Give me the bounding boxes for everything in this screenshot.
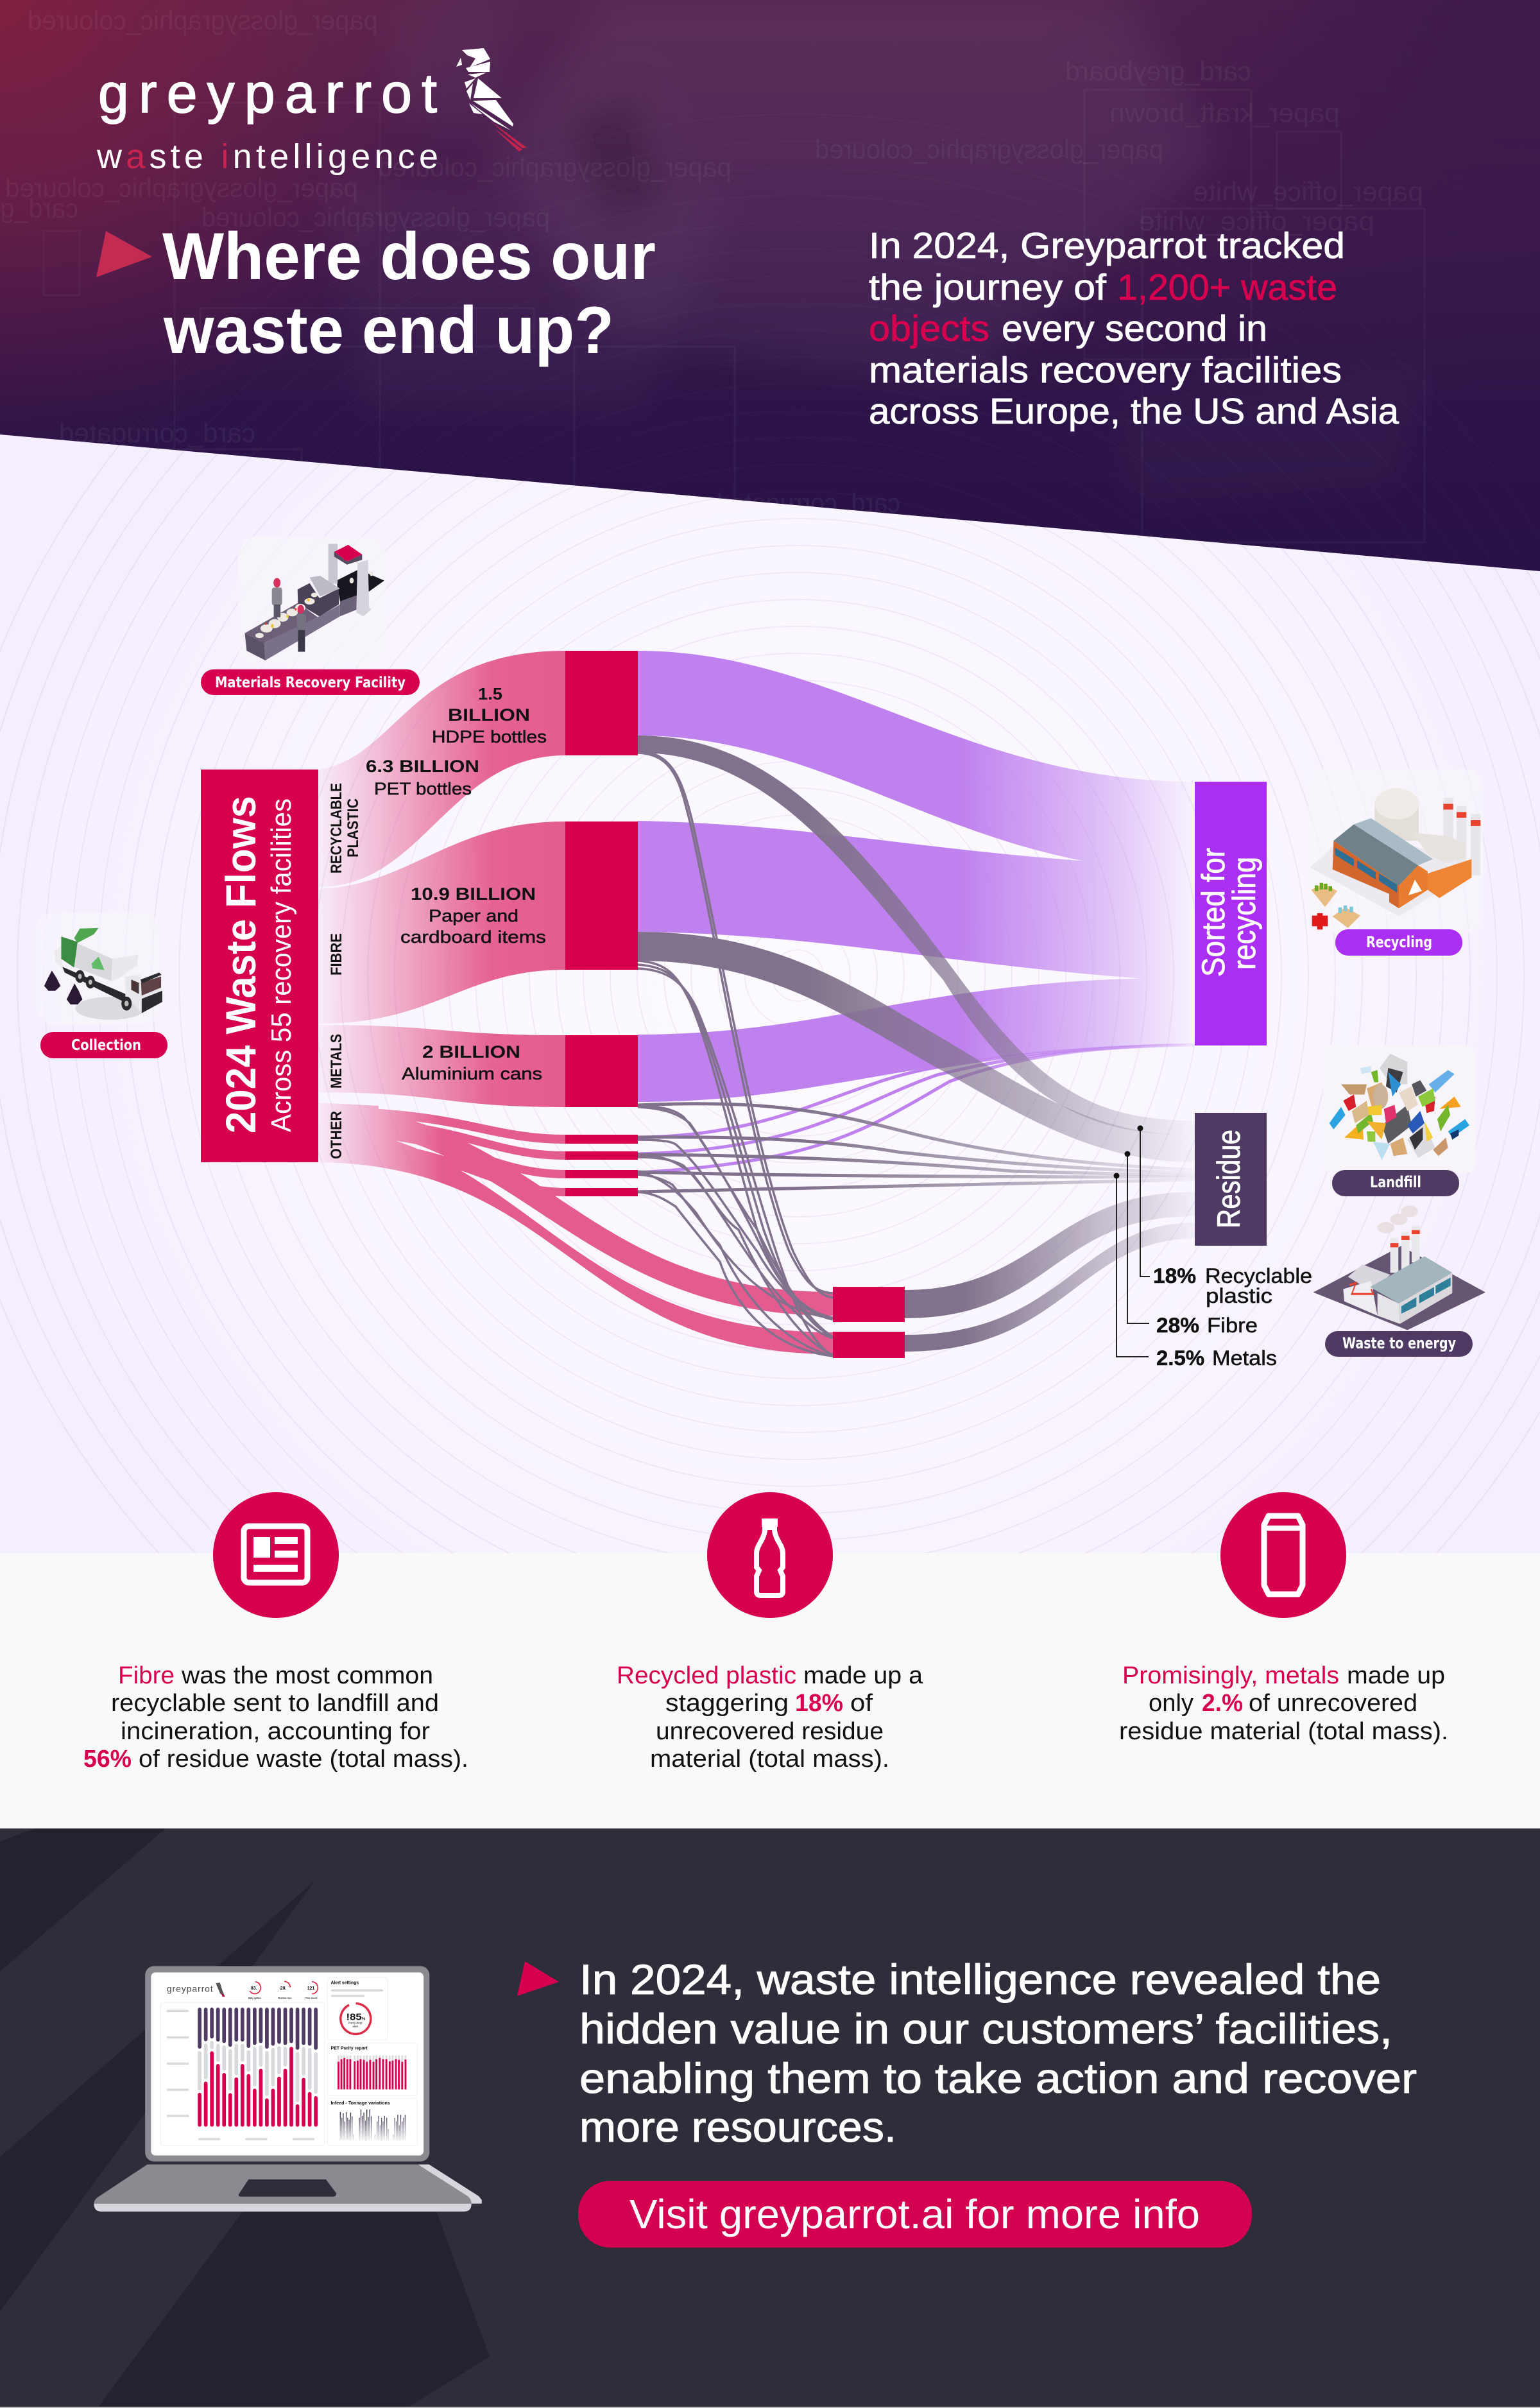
panel: hero header background [0,0,1540,1837]
intro text: In 2024, Greyparrot tracked [869,225,1345,266]
panel: hero header background: paper_glossygraphic_coloured [28,5,378,35]
label: waste to energy [1325,1331,1473,1357]
label: materials recovery facility [201,669,420,695]
icon: parrot [456,48,527,151]
icon: laptop dashboard: Time saved [305,1997,317,2000]
label: collection: Collection [71,1037,141,1054]
callouts: residue breakdown: plastic [1206,1284,1272,1307]
text: plastic fact: unrecovered residue [656,1718,884,1745]
node: recyclable plastic [565,651,638,755]
dashboard gauges [250,1981,318,1994]
icon: laptop dashboard: 83. [251,1986,257,1991]
panel: hero header background: paper_glossygraphic_coloured [5,173,358,203]
dashboard panels [160,1977,417,2146]
labels: item counts on flows: 2 BILLION [422,1042,520,1062]
intro text: every second in [1002,308,1267,349]
icon: landfill pile [1323,1045,1476,1173]
callouts: residue breakdown: Metals [1212,1346,1277,1370]
dashboard alert settings: Alert settings [330,1981,359,1985]
flow: lower nodes to residue [905,1192,1195,1352]
panel: hero header background: card_greyboard [1065,56,1251,86]
callouts: residue breakdown: 28% [1156,1314,1199,1337]
footer statement: In 2024, waste intelligence revealed the [579,1956,1381,2003]
footer statement: more resources. [579,2103,896,2151]
footer statement [579,1956,1417,2151]
icon: laptop dashboard [94,1966,482,2212]
text: metals fact: residue material (total mass). [1119,1718,1448,1745]
text: fibre fact: incineration, accounting for [121,1718,430,1745]
labels: item counts on flows: PET bottles [374,779,472,798]
icon: laptop dashboard: 28. [280,1986,286,1991]
laptop screen [145,1966,429,2162]
panel: residue [1195,1113,1267,1246]
label: materials recovery facility: Materials Recovery Facility [215,675,406,691]
logo tagline: waste intelligence [96,137,438,176]
icon: title triangle [96,231,152,277]
panel: 2024 waste flows title box [201,770,318,1162]
text: fibre fact: was the most common [181,1662,433,1689]
callouts: residue breakdown [1114,1126,1312,1370]
title: waste end up? [163,293,614,368]
icon: can [1220,1492,1346,1618]
icon: footer triangle [517,1961,559,1996]
text: plastic fact [617,1662,923,1773]
labels: item counts on flows [366,684,547,1083]
icon: waste to energy plant [1313,1205,1485,1330]
title: Where does our [162,219,656,294]
button: visit greyparrot.ai [578,2181,1252,2248]
label: landfill: Landfill [1370,1173,1421,1191]
labels: material categories: FIBRE [328,933,345,976]
heading: 2024 Waste Flows: 2024 Waste Flows [217,796,264,1133]
logo wordmark: greyparrot [98,63,437,125]
dashboard PET purity report: PET Purity report [330,2046,368,2051]
panel: footer background [0,1828,1540,2408]
flow: thin grey lines to lower nodes [638,751,833,1356]
text: fibre fact: Fibre [118,1662,175,1689]
text: plastic fact: staggering [665,1690,789,1717]
panel: hero header background: card_corrugated [59,418,255,448]
intro text: objects [869,308,989,349]
panel: hero header background: paper_office_white [1139,206,1374,236]
text: metals fact [1119,1662,1448,1745]
panel: facts background [0,1553,1540,1828]
text: fibre fact: 56% [83,1746,132,1773]
button: visit greyparrot.ai: Visit greyparrot.ai for more info [629,2191,1200,2237]
panel: hero header background: paper_glossygraphic_coloured [815,134,1163,164]
panel: sorted for recycling: Sorted for [1195,848,1231,977]
chart: sankey waste flows [319,651,1195,1358]
text: plastic fact: made up a [803,1662,923,1689]
callouts: residue breakdown: Recyclable [1205,1264,1312,1287]
footer statement: enabling them to take action and recover [579,2054,1417,2102]
label: waste to energy: Waste to energy [1342,1334,1456,1352]
labels: item counts on flows: cardboard items [400,927,546,947]
labels: item counts on flows: 10.9 BILLION [411,884,536,904]
text: metals fact: made up [1347,1662,1445,1689]
labels: item counts on flows: 6.3 BILLION [366,757,479,776]
text: fibre fact: recyclable sent to landfill and [111,1690,439,1717]
dashboard alert settings: !85 [346,2011,362,2022]
panel: hero header background: paper_kraft_brown [1109,98,1340,128]
icon: bottle [707,1492,833,1618]
dashboard alert settings: % [362,2017,366,2021]
panel: sorted for recycling: recycling [1226,857,1262,970]
icon: laptop dashboard: 121 [307,1986,314,1991]
icon: materials recovery facility [237,536,387,667]
footer statement: hidden value in our customers’ facilities, [579,2005,1392,2052]
flow: thin purple strands [638,1045,1195,1173]
icon: laptop dashboard: Daily uptime [248,1997,261,2000]
dashboard PET purity report [330,2046,406,2090]
intro text [869,225,1399,432]
panel: hero header background: paper_glossygraphic_coloured [201,202,550,232]
label: recycling [1335,929,1462,956]
icon: newspaper [213,1492,339,1618]
labels: material categories: RECYCLABLE [328,783,345,873]
panel: hero header background: paper_office_white [1193,176,1423,207]
laptop base [94,2165,482,2212]
text: plastic fact: Recycled plastic [617,1662,796,1689]
flow: purple sorted for recycling [638,651,1195,1102]
text: metals fact: Promisingly, metals [1122,1662,1339,1689]
callouts: residue breakdown: 18% [1153,1264,1196,1287]
dashboard main chart [166,2008,318,2140]
labels: material categories: OTHER [328,1111,345,1159]
labels: item counts on flows: HDPE bottles [432,727,547,746]
dashboard logo [167,1982,225,1997]
intro text: materials recovery facilities [869,350,1342,391]
text: plastic fact: 18% [795,1690,843,1717]
icon: collection truck [35,913,163,1024]
dashboard infeed tonnage variations [330,2101,405,2140]
labels: item counts on flows: BILLION [448,705,530,725]
dashboard alert settings: alert [352,2025,359,2028]
dashboard logo: greyparrot [167,1984,213,1994]
label: recycling: Recycling [1366,933,1432,951]
text: fibre fact: of residue waste (total mass). [139,1746,468,1773]
text: metals fact: 2.% [1202,1690,1243,1717]
text: fibre fact [83,1662,468,1773]
intro text: the journey of [869,267,1106,308]
flow: thin grey lines to residue [638,1104,1195,1192]
panel: hero header background: card_corrugated [717,488,900,518]
node: fibre [565,821,638,970]
text: plastic fact: material (total mass). [650,1746,889,1773]
panel: residue: Residue [1211,1130,1247,1228]
panel: sorted for recycling [1195,782,1267,1045]
text: metals fact: only [1149,1690,1194,1717]
text: metals fact: of unrecovered [1249,1690,1417,1717]
flow: other waste strands [319,1103,833,1354]
callouts: residue breakdown: Fibre [1207,1314,1258,1337]
text: plastic fact: of [850,1690,873,1717]
label: landfill [1332,1170,1459,1196]
labels: material categories: METALS [328,1034,345,1088]
node: metals [565,1035,638,1107]
dashboard infeed tonnage variations: Infeed - Tonnage variations [330,2101,390,2106]
logo: greyparrot [96,48,527,176]
dashboard alert settings: Purity drop [348,2022,363,2025]
labels: material categories [328,783,362,1159]
label: collection [40,1032,167,1058]
sub heading: across 55 recovery facilities: Across 55 recovery facilities [266,798,297,1132]
dashboard alert settings [330,1981,383,2034]
labels: item counts on flows: Paper and [429,906,518,925]
labels: item counts on flows: 1.5 [478,684,502,703]
flow: pink source flows to material nodes [319,651,565,1107]
intro text: across Europe, the US and Asia [869,391,1399,432]
panel: flow chart background [0,434,1540,1553]
panel: hero header background: paper_glossygraphic_coloured [378,152,732,182]
node: lower nodes [833,1287,905,1358]
labels: item counts on flows: Aluminium cans [402,1064,542,1083]
title [162,219,656,368]
node: other small nodes [565,1135,638,1196]
icon: recycling plant [1308,769,1484,933]
labels: material categories: PLASTIC [345,798,362,857]
callouts: residue breakdown: 2.5% [1156,1346,1204,1370]
icon: laptop dashboard: Residue loss [278,1997,292,2000]
intro text: 1,200+ waste [1117,267,1337,308]
flow: grey residue strands [638,735,1195,1135]
